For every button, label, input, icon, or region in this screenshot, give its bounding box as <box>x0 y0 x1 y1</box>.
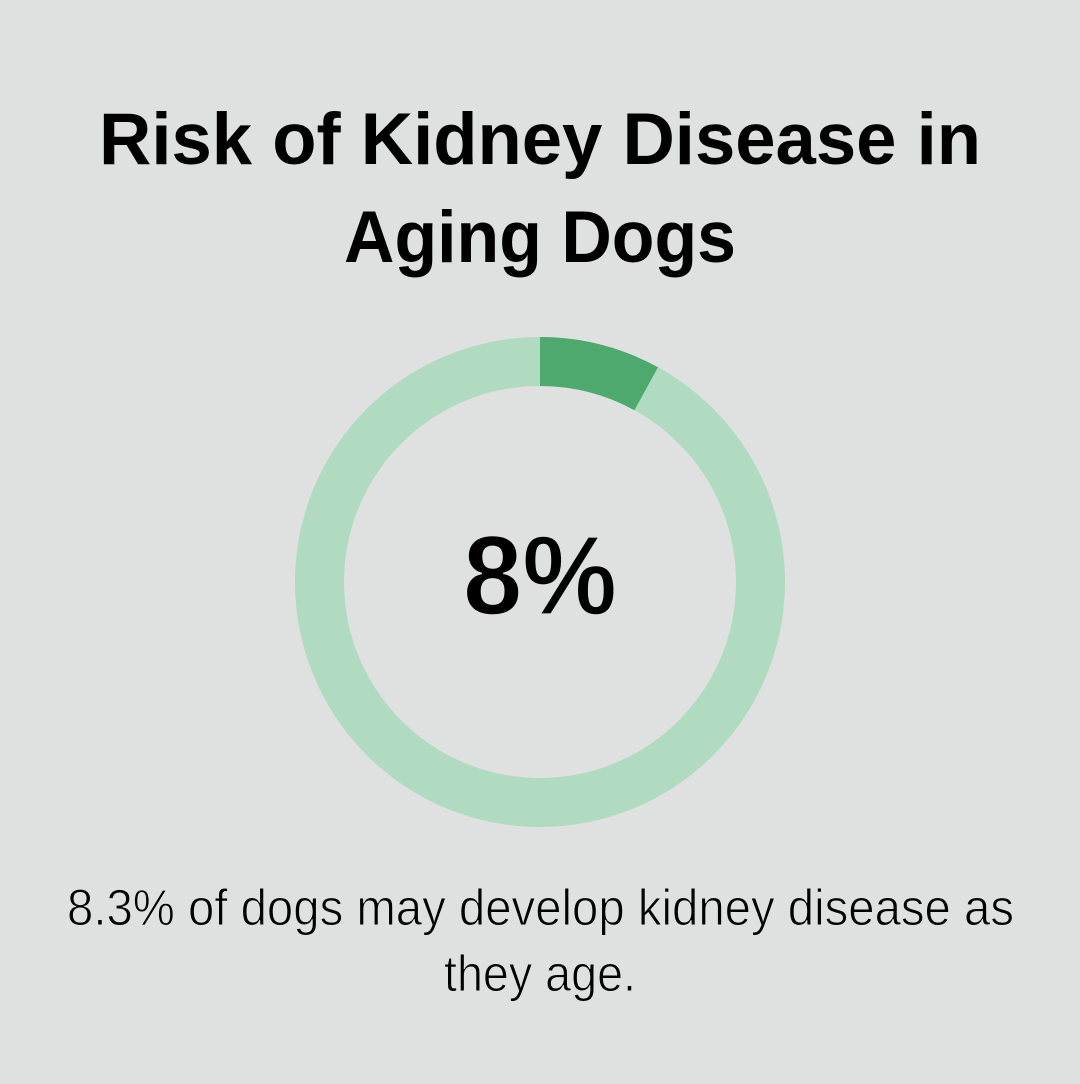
donut track <box>320 362 760 802</box>
center value: 8% <box>463 513 617 638</box>
title: Aging Dogs <box>344 197 736 278</box>
caption: they age. <box>444 945 636 1002</box>
donut highlighted segment: 8% <box>540 337 658 410</box>
title: Risk of Kidney Disease in <box>99 99 981 180</box>
donut chart <box>320 337 760 802</box>
title <box>99 99 981 278</box>
caption: 8.3% of dogs may develop kidney disease as <box>67 879 1014 936</box>
caption <box>67 879 1014 1002</box>
